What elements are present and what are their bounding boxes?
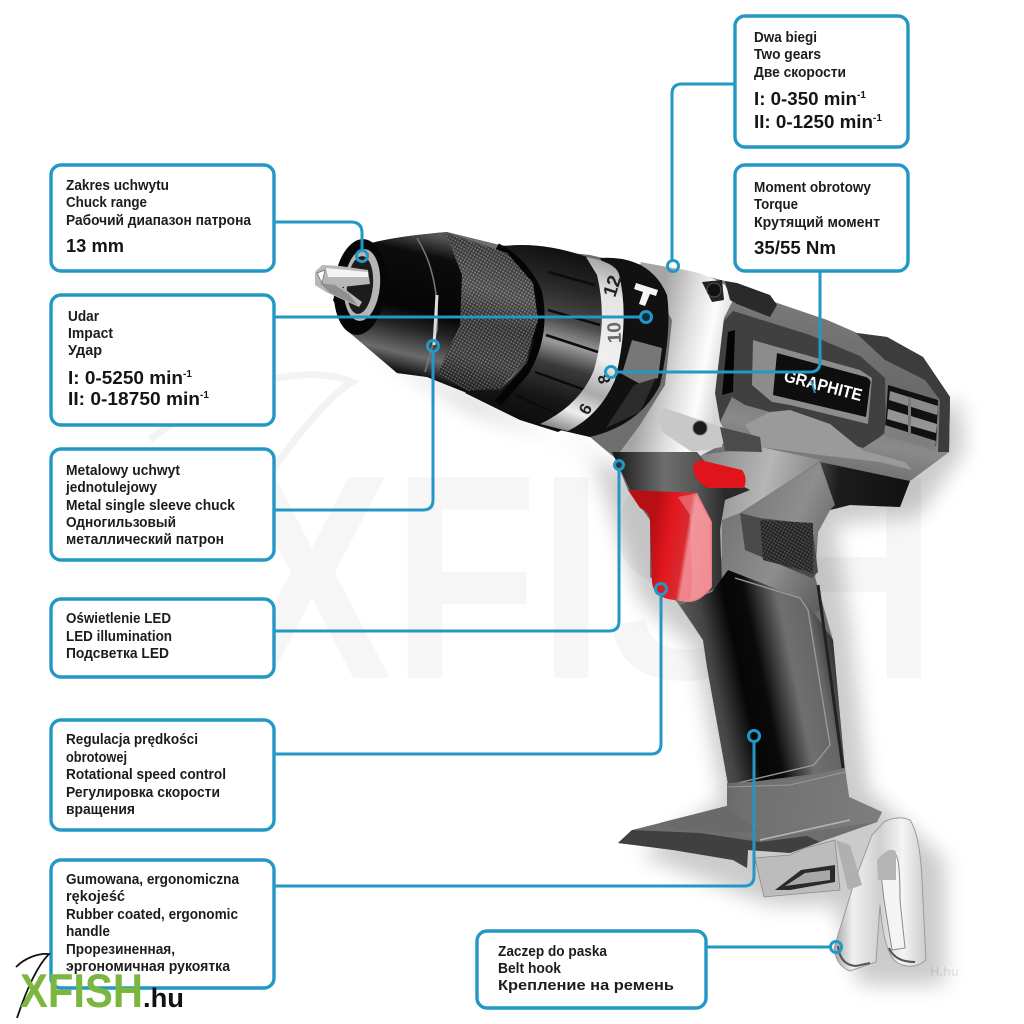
panel: belt hook: Zaczep do paska bbox=[498, 944, 608, 960]
panel: metal chuck bbox=[51, 449, 274, 560]
panel: chuck range: Zakres uchwytu bbox=[66, 178, 169, 194]
logo plate bbox=[773, 353, 870, 417]
chuck knurled sleeve bbox=[437, 234, 538, 391]
dark rear underside bbox=[800, 462, 910, 510]
neck grey bbox=[697, 447, 822, 560]
panel: impact bbox=[51, 295, 274, 425]
watermark: small .hu: H.hu bbox=[930, 964, 959, 979]
ring numbers bbox=[575, 273, 626, 418]
belt clip bracket bbox=[755, 840, 840, 897]
panel: chuck range: 13 mm bbox=[66, 236, 124, 256]
panel: chuck range: Рабочий диапазон патрона bbox=[66, 213, 252, 229]
panel: gears: -1 bbox=[857, 90, 866, 101]
trigger housing bbox=[612, 452, 750, 605]
panel: gears: Две скорости bbox=[754, 65, 846, 81]
silver front housing bbox=[620, 262, 733, 456]
panel: chuck range bbox=[51, 165, 274, 271]
panel: speed control: вращения bbox=[66, 802, 135, 818]
panel: gears: Two gears bbox=[754, 47, 821, 63]
motor rear dark cap bbox=[856, 333, 950, 452]
icon: hammer T bbox=[634, 283, 658, 306]
panel: metal chuck: Одногильзовый bbox=[66, 515, 176, 531]
panel: impact: Udar bbox=[68, 309, 99, 325]
logo: XFISH.hu: XFISH bbox=[20, 964, 143, 1017]
connector: torque bbox=[606, 271, 820, 378]
connector: impact bbox=[274, 312, 652, 322]
panel: impact: I: 0-5250 min bbox=[68, 368, 183, 388]
panel: speed control: Регулировка скорости bbox=[66, 785, 220, 801]
panel: gears: II: 0-1250 min bbox=[754, 112, 873, 132]
panel: LED: Подсветка LED bbox=[66, 646, 169, 662]
connector: metal chuck bbox=[274, 340, 438, 510]
ring numbers: 10 bbox=[604, 322, 626, 344]
panel: gears: Dwa biegi bbox=[754, 30, 817, 46]
connector: belt hook bbox=[706, 942, 842, 952]
panel: handle: Прорезиненная, bbox=[66, 942, 175, 958]
gear collar front bbox=[465, 245, 618, 432]
panel: impact: Impact bbox=[68, 326, 113, 342]
panel: handle: Rubber coated, ergonomic bbox=[66, 907, 238, 923]
panel: handle: Gumowana, ergonomiczna bbox=[66, 872, 240, 888]
silhouette base bbox=[333, 232, 950, 868]
panel: torque: Torque bbox=[754, 197, 798, 213]
ring numbers: 12 bbox=[600, 273, 626, 300]
panel: handle: эргономичная рукоятка bbox=[66, 959, 231, 975]
panel: chuck range: Chuck range bbox=[66, 195, 147, 211]
panel: gears: -1 bbox=[873, 113, 882, 124]
logo: GRAPHITE: GRAPHITE bbox=[782, 366, 864, 405]
motor housing bbox=[668, 268, 950, 481]
belt hook bbox=[834, 818, 926, 971]
panel: LED: Oświetlenie LED bbox=[66, 611, 171, 627]
ring numbers: 6 bbox=[575, 400, 596, 418]
panel: speed control: Rotational speed control bbox=[66, 767, 226, 783]
red switch bbox=[693, 460, 746, 488]
panel: gears: I: 0-350 min bbox=[754, 89, 857, 109]
connector: speed control bbox=[274, 584, 666, 754]
gear collar rear bbox=[560, 258, 668, 437]
logo: XFISH.hu: .hu bbox=[143, 983, 184, 1013]
drill bbox=[315, 232, 965, 985]
panel: metal chuck: jednotulejowy bbox=[65, 480, 157, 496]
panel: belt hook bbox=[477, 931, 706, 1008]
panel: gears bbox=[735, 16, 908, 147]
vents bbox=[884, 385, 938, 450]
panel: handle: rękojeść bbox=[66, 889, 125, 905]
panel: LED: LED illumination bbox=[66, 629, 172, 645]
panel: belt hook: Belt hook bbox=[498, 961, 562, 977]
front screw bosses bbox=[657, 280, 777, 452]
silver speed ring bbox=[540, 257, 624, 431]
panel: handle bbox=[51, 860, 274, 988]
logo: XFISH.hu bbox=[16, 954, 184, 1018]
panel: belt hook: Крепление на ремень bbox=[498, 978, 674, 994]
panel: impact: -1 bbox=[183, 369, 192, 380]
chuck jaws bbox=[315, 265, 370, 307]
connector: chuck range bbox=[274, 222, 368, 262]
panel: metal chuck: металлический патрон bbox=[66, 532, 224, 548]
chuck body bbox=[333, 232, 540, 393]
panel: speed control: Regulacja prędkości bbox=[66, 732, 198, 748]
ring numbers: 8 bbox=[594, 372, 615, 386]
panel: handle: handle bbox=[66, 924, 110, 940]
grip upper section bbox=[680, 462, 835, 645]
grip collar bbox=[660, 768, 882, 840]
panel: metal chuck: Metalowy uchwyt bbox=[66, 463, 180, 479]
connector: LED bbox=[274, 460, 624, 631]
panel: metal chuck: Metal single sleeve chuck bbox=[66, 498, 236, 514]
panel: impact: II: 0-18750 min bbox=[68, 389, 200, 409]
drill shadow bbox=[365, 345, 965, 985]
panel: torque: Moment obrotowy bbox=[754, 180, 871, 196]
panel: impact: -1 bbox=[200, 390, 209, 401]
motor inner light panel bbox=[752, 340, 872, 424]
panel: speed control bbox=[51, 720, 274, 830]
chuck nose bbox=[330, 237, 390, 337]
trigger bbox=[628, 490, 712, 602]
grip main bbox=[680, 570, 845, 785]
panel: LED bbox=[51, 599, 274, 677]
motor panel frame bbox=[715, 311, 886, 448]
panel: torque bbox=[735, 165, 908, 271]
connector: gears bbox=[668, 84, 735, 272]
textured grip patch bbox=[740, 513, 818, 578]
panel: torque: Крутящий момент bbox=[754, 215, 880, 231]
panel: impact: Удар bbox=[68, 343, 102, 359]
base plate bbox=[618, 830, 820, 868]
panel: torque: 35/55 Nm bbox=[754, 238, 836, 258]
motor lower grey band bbox=[745, 410, 912, 470]
connector: handle bbox=[274, 730, 760, 886]
panel: speed control: obrotowej bbox=[66, 750, 127, 766]
